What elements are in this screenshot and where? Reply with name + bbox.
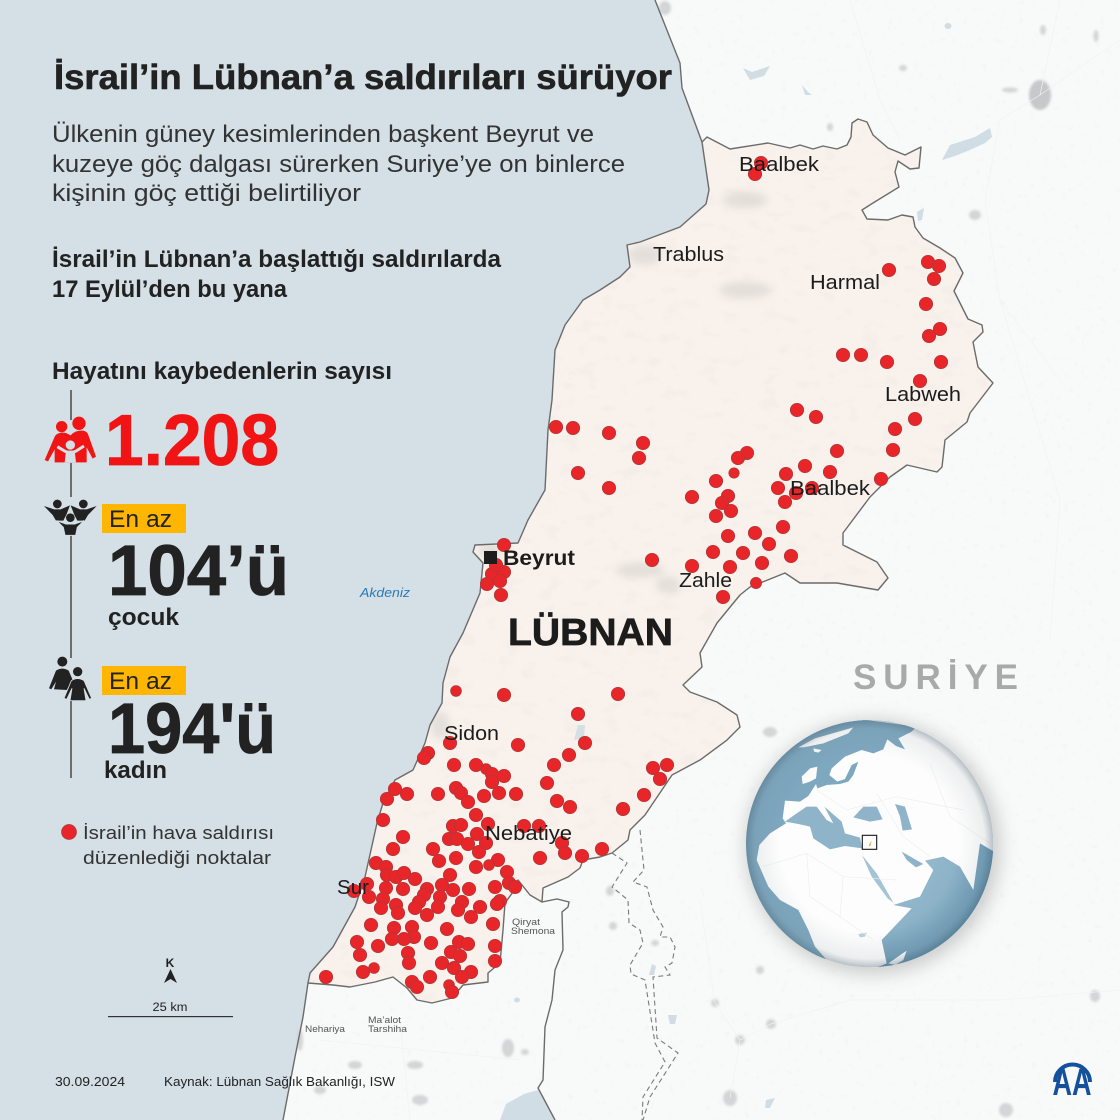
icon: family — [45, 417, 96, 462]
country label: Suriye: SURİYE — [853, 658, 1018, 697]
badge: En az (children): En az — [109, 506, 172, 533]
Israeli town labels: Tarshiha — [368, 1024, 408, 1035]
locator globe — [730, 710, 1000, 974]
timeline vertical line — [70, 390, 72, 778]
icon: children — [44, 500, 97, 535]
source: Kaynak: Lübnan Sağlık Bakanlığı, ISW — [164, 1075, 395, 1089]
strike points — [319, 156, 948, 999]
subheading: 17 Eylül’den bu yana — [52, 276, 288, 303]
neighbouring land details: cities and lakes — [297, 0, 1120, 1120]
city labels — [337, 154, 961, 899]
city labels: Sidon — [444, 723, 499, 745]
legend: strike points: düzenlediği noktalar — [83, 847, 271, 868]
Israeli town labels: Nehariya — [305, 1024, 346, 1035]
country label: Lübnan: LÜBNAN — [508, 611, 673, 654]
intro text — [52, 121, 625, 207]
city labels: Sur — [337, 877, 369, 899]
north arrow — [164, 956, 177, 983]
city labels: Baalbek — [739, 154, 820, 176]
badge: En az (children) — [102, 504, 186, 533]
date: 30.09.2024 — [55, 1075, 125, 1089]
intro text: kuzeye göç dalgası sürerken Suriye’ye on binlerce — [52, 151, 625, 178]
sea — [0, 0, 709, 1120]
label: kadın: kadın — [104, 757, 167, 784]
Israeli town labels: Ma’alot — [368, 1015, 401, 1026]
legend: strike points: İsrail’in hava saldırısı — [83, 822, 274, 843]
subheading: İsrail’in Lübnan’a başlattığı saldırılarda — [52, 246, 502, 273]
Beirut marker and label: Beyrut — [503, 547, 575, 570]
sea label: Akdeniz — [359, 585, 411, 600]
title: İsrail’in Lübnan’a saldırıları sürüyor — [54, 58, 672, 97]
value: 104'ü: 104’ü — [108, 532, 289, 611]
badge: En az (women) — [102, 666, 186, 695]
city labels: Labweh — [885, 384, 961, 406]
city labels: Baalbek — [790, 478, 871, 500]
legend: strike points — [62, 822, 274, 868]
subheading — [52, 246, 502, 303]
intro text: kişinin göç ettiği belirtiliyor — [52, 180, 361, 207]
city labels: Trablus — [653, 244, 724, 266]
Israeli town labels: Qiryat — [512, 917, 540, 928]
value: 194'ü: 194'ü — [108, 690, 276, 769]
value: 1.208: 1.208 — [105, 401, 279, 481]
north arrow: K — [166, 956, 175, 970]
Israeli town labels — [305, 917, 556, 1035]
borders: coasts, Israel and Golan lines — [283, 0, 702, 1120]
scale bar — [108, 1002, 233, 1017]
deaths heading: Hayatını kaybedenlerin sayısı — [52, 358, 392, 385]
icon: women — [49, 657, 92, 701]
city labels: Zahle — [679, 570, 732, 592]
label: çocuk: çocuk — [108, 604, 180, 631]
icon: AA logo: AA — [1052, 1062, 1092, 1104]
Lebanon territory — [308, 119, 993, 1003]
Israeli town labels: Shemona — [511, 926, 556, 937]
badge: En az (women): En az — [109, 668, 172, 695]
locator box — [862, 835, 877, 849]
globe oceans — [746, 720, 993, 967]
city labels: Harmal — [810, 272, 880, 294]
city labels: Nebatiye — [485, 823, 572, 845]
scale bar: 25 km — [152, 1002, 188, 1014]
intro text: Ülkenin güney kesimlerinden başkent Beyrut ve — [52, 121, 594, 148]
